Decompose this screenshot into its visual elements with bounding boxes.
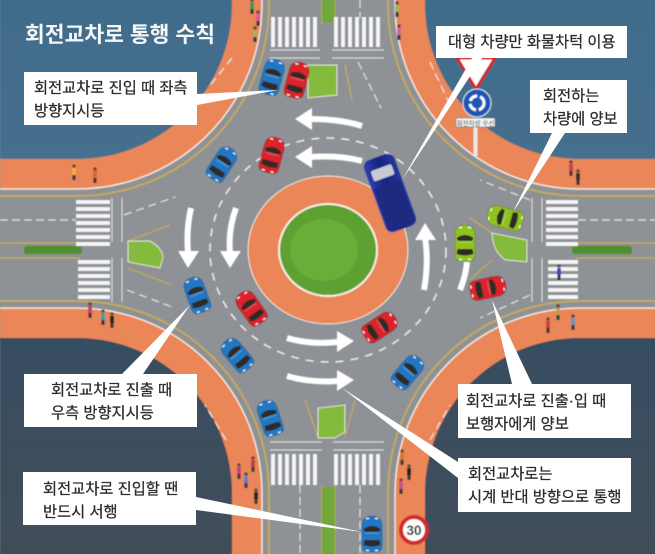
icon: traffic signs: 회전차량 우선 [457, 118, 494, 128]
callout: yield to pedestrians: 보행자에게 양보 [466, 416, 569, 433]
callout: counter-clockwise travel: 회전교차로는 [468, 466, 552, 483]
arrows: counter-clockwise direction [178, 108, 467, 391]
callout: counter-clockwise travel [342, 388, 631, 512]
callout: yield to pedestrians: 회전교차로 진출·입 때 [466, 393, 606, 410]
callout: large vehicles: 대형 차량만 화물차턱 이용 [448, 34, 616, 51]
callout: yield to pedestrians [458, 300, 631, 438]
icon: splitter islands [128, 65, 527, 438]
icon: large blue truck [362, 152, 418, 234]
icon: speed limit sign: 30 [406, 523, 422, 538]
callout: slow down on entry [23, 472, 362, 532]
icon: speed limit sign [401, 517, 427, 543]
callout: right signal on exit [24, 305, 197, 427]
callout: yield to circulating vehicles: 회전하는 [543, 88, 599, 105]
icon: crosswalks [76, 17, 578, 485]
callout: left signal on entry [24, 72, 278, 125]
callout: right signal on exit: 우측 방향지시등 [51, 405, 154, 422]
callout: slow down on entry: 회전교차로 진입할 땐 [43, 481, 178, 498]
callout: yield to circulating vehicles [513, 80, 627, 212]
callout: counter-clockwise travel: 시계 반대 방향으로 통행 [468, 489, 621, 506]
title: 회전교차로 통행 수칙 [25, 23, 215, 47]
callout: left signal on entry: 방향지시등 [34, 103, 104, 120]
icon: cars [181, 57, 525, 552]
callout: right signal on exit: 회전교차로 진출 때 [51, 382, 172, 399]
callout: yield to circulating vehicles: 차량에 양보 [543, 111, 618, 128]
icon: traffic signs [456, 58, 495, 156]
central island [248, 176, 408, 324]
icon: pedestrians [72, 0, 580, 504]
callout: slow down on entry: 반드시 서행 [43, 504, 118, 521]
callout: large vehicles [402, 26, 627, 180]
callout: left signal on entry: 회전교차로 진입 때 좌측 [34, 80, 187, 97]
